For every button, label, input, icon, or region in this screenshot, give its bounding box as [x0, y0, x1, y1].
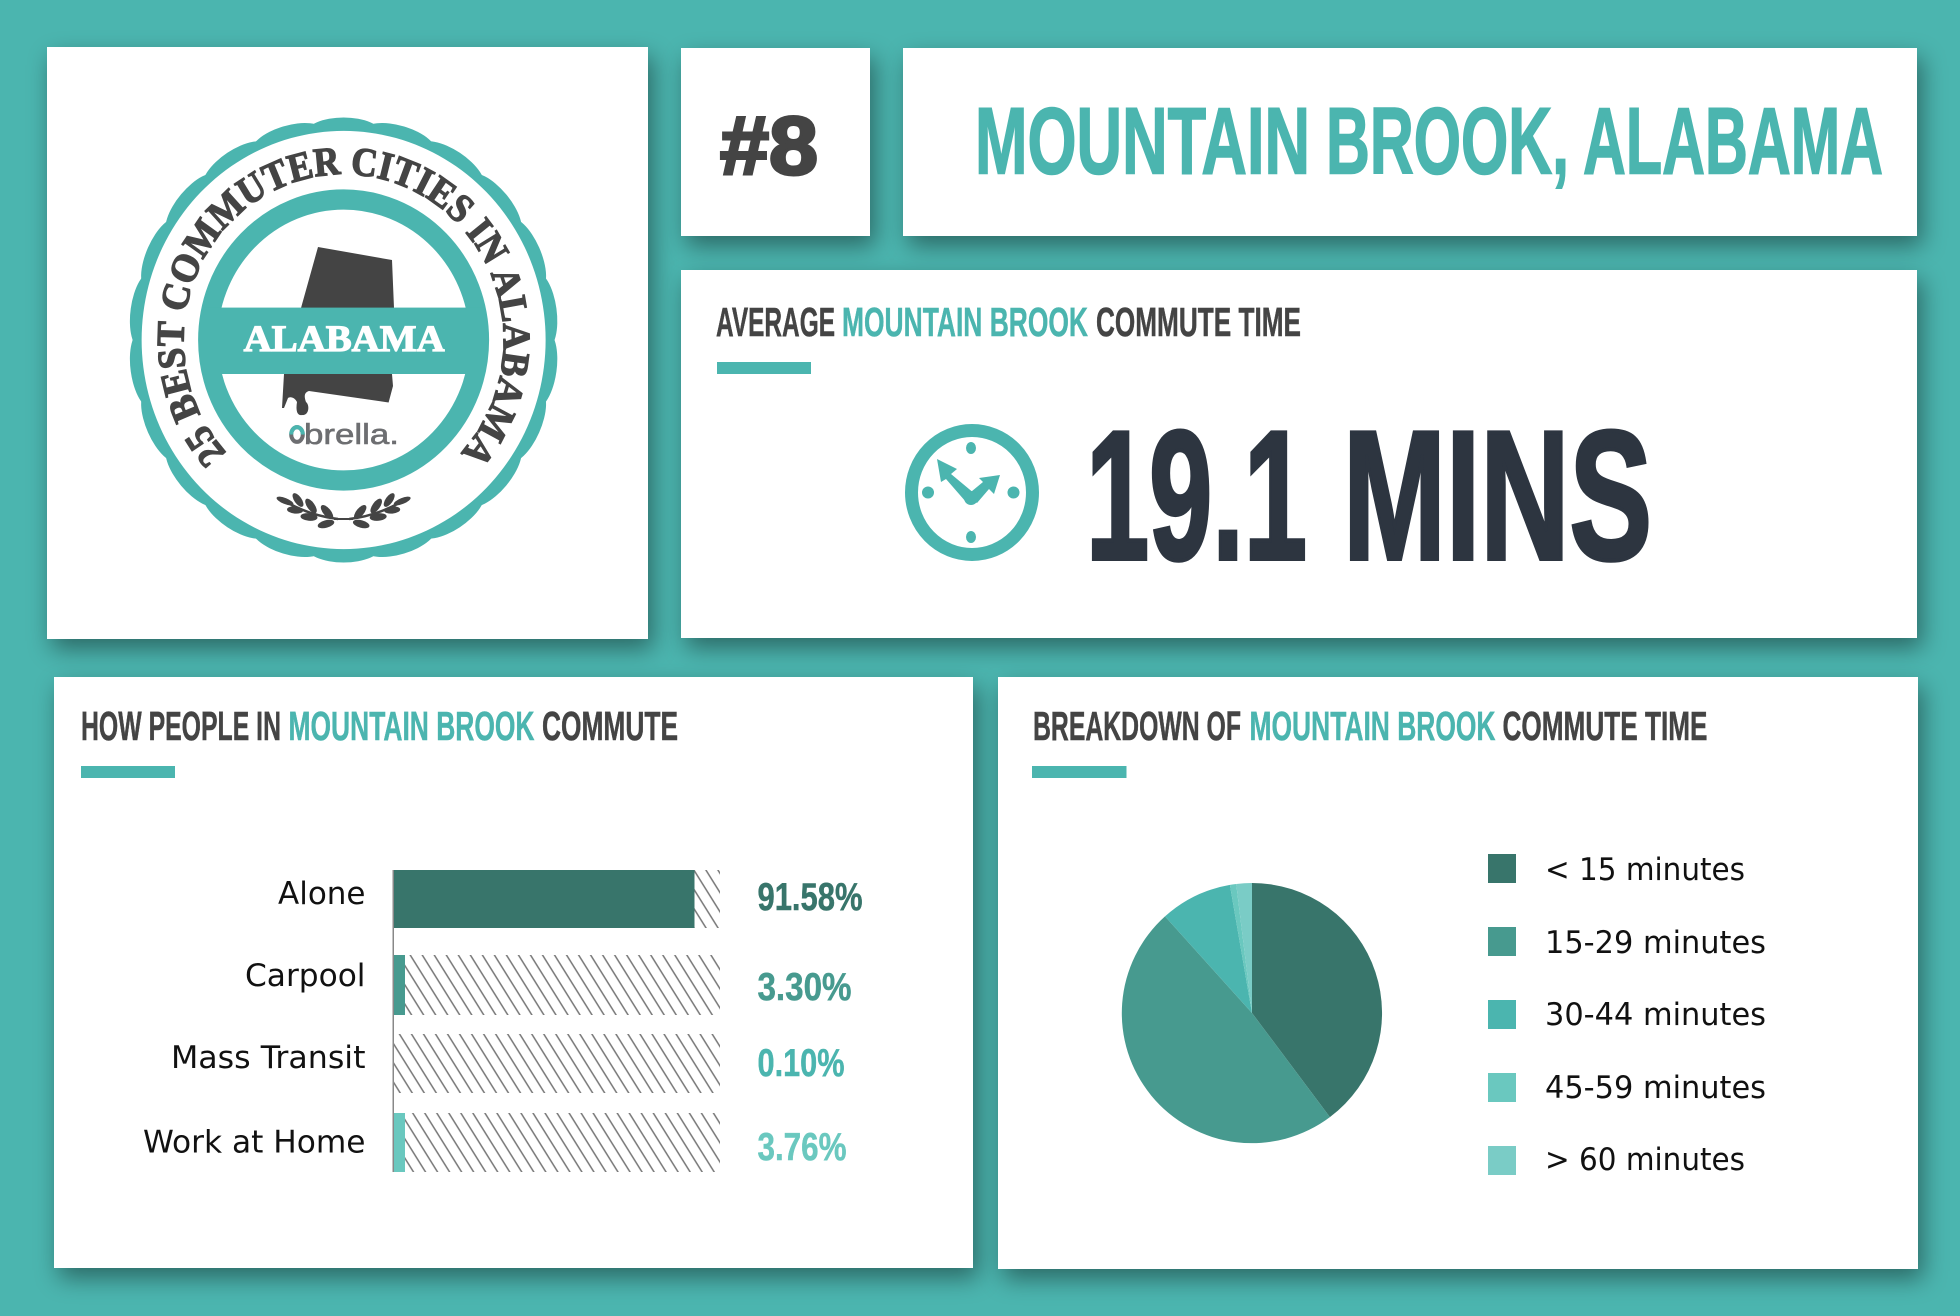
curved badge text: 25 BEST COMMUTER CITIES IN ALABAMA [157, 148, 530, 468]
title: BROOK, [1326, 88, 1569, 194]
row: Carpool [245, 955, 852, 1015]
panel: average commute time [681, 270, 1917, 638]
row: Mass Transit [171, 1034, 844, 1093]
row: Mass Transit: Mass Transit [171, 1040, 366, 1076]
heading: average commute time: COMMUTE TIME [1096, 299, 1301, 345]
big stat: 19.1 MINS [1086, 392, 1652, 598]
heading: average commute time: MOUNTAIN BROOK [842, 299, 1088, 345]
row: Work at Home: 3.76% [758, 1126, 846, 1169]
icon: clock [912, 430, 1032, 554]
heading: average commute time [716, 299, 1301, 345]
legend: < 15 minutes [1545, 852, 1745, 888]
panel: badge [38, 42, 668, 664]
panel: commute time breakdown [998, 677, 1918, 1269]
row: Carpool: 3.30% [758, 966, 852, 1009]
banner [204, 308, 483, 374]
heading: how people commute: COMMUTE [542, 703, 678, 749]
heading: how people commute: MOUNTAIN BROOK [288, 703, 535, 749]
legend: > 60 minutes [1545, 1142, 1745, 1178]
big stat: 19.1 MINS: MINS [1343, 392, 1652, 598]
panel: title [903, 48, 1917, 236]
row: Work at Home: Work at Home [143, 1124, 366, 1160]
icon: laurel [276, 491, 412, 530]
badge: Alabama seal [130, 118, 558, 562]
row: Alone: 91.58% [758, 876, 862, 919]
row: Mass Transit: 0.10% [758, 1042, 844, 1085]
panel: rank [681, 48, 870, 236]
heading: commute time breakdown: COMMUTE TIME [1502, 703, 1708, 749]
row: Work at Home [143, 1113, 846, 1172]
row: Alone: Alone [278, 876, 366, 912]
legend: 30-44 minutes [1545, 997, 1766, 1033]
title: MOUNTAIN [975, 88, 1310, 194]
legend [1488, 852, 1766, 1178]
pie chart [1122, 883, 1382, 1143]
legend: 45-59 minutes [1545, 1070, 1766, 1106]
heading: commute time breakdown [1033, 703, 1708, 749]
heading: commute time breakdown: BREAKDOWN OF [1033, 703, 1241, 749]
scalloped badge edge and rings [130, 118, 558, 562]
heading: commute time breakdown: MOUNTAIN BROOK [1250, 703, 1496, 749]
row: Carpool: Carpool [245, 958, 366, 994]
banner text: ALABAMA: ALABAMA [244, 319, 445, 360]
legend: 15-29 minutes [1545, 925, 1766, 961]
heading: how people commute: HOW PEOPLE IN [81, 703, 281, 749]
heading: how people commute [81, 703, 678, 749]
title [975, 88, 1883, 194]
icon: Alabama state silhouette [282, 247, 394, 415]
heading: average commute time: AVERAGE [716, 299, 835, 345]
logo: obrella: brella. [304, 419, 399, 451]
panel: how people commute [54, 677, 973, 1268]
bar chart [143, 870, 862, 1172]
rank number: #8 [720, 99, 818, 192]
big stat: 19.1 MINS: 19.1 [1086, 392, 1307, 598]
row: Alone [278, 870, 862, 928]
